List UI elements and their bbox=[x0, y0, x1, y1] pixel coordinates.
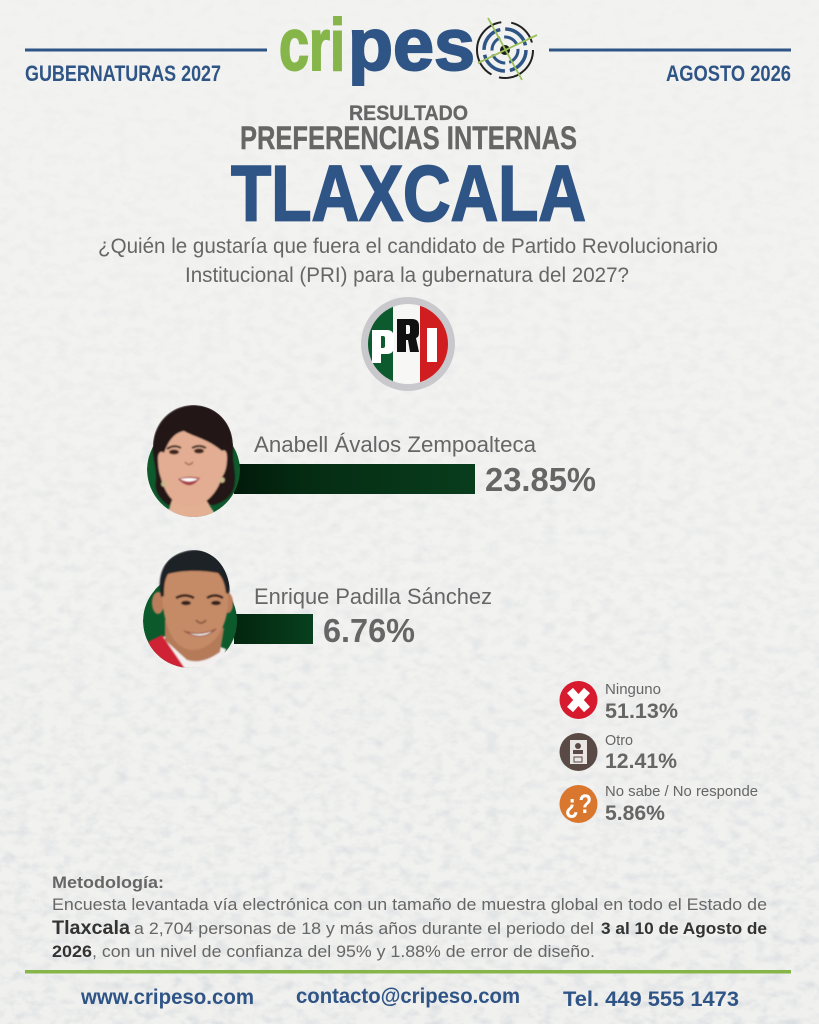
result bar bbox=[234, 614, 313, 644]
percentage: 6.76% bbox=[323, 612, 415, 649]
percentage: 23.85% bbox=[485, 461, 596, 498]
methodology text: Tlaxcala bbox=[52, 918, 130, 939]
logo: cripeso: pes bbox=[348, 5, 475, 86]
methodology text: Encuesta levantada vía electrónica con un tamaño de muestra global en todo el Estado de bbox=[52, 896, 767, 914]
icon: red cross bbox=[560, 681, 598, 719]
survey question: ¿Quién le gustaría que fuera el candidato de Partido Revolucionario bbox=[98, 235, 718, 258]
label: No sabe / No responde bbox=[605, 783, 758, 800]
header label: gubernaturas: GUBERNATURAS 2027 bbox=[25, 61, 221, 86]
logo: cripeso: cri bbox=[279, 5, 345, 86]
heading: resultado: RESULTADO bbox=[349, 102, 468, 125]
icon: question marks: ¿? bbox=[565, 789, 592, 819]
methodology text: , con un nivel de confianza del 95% y 1.88% de error de diseño. bbox=[92, 943, 595, 961]
label: Ninguno bbox=[605, 681, 661, 698]
candidate name: Enrique Padilla Sánchez bbox=[254, 584, 492, 609]
value: 12.41% bbox=[605, 749, 677, 773]
result bar bbox=[234, 464, 475, 494]
footer rule bbox=[25, 970, 791, 974]
other answer: ninguno bbox=[560, 681, 678, 723]
label: Otro bbox=[605, 732, 633, 749]
header label: date: AGOSTO 2026 bbox=[666, 61, 791, 86]
icon: target bbox=[477, 18, 537, 80]
header rule left bbox=[25, 48, 267, 52]
portrait bbox=[143, 550, 237, 671]
value: 5.86% bbox=[605, 801, 665, 825]
methodology text bbox=[52, 874, 767, 961]
heading: preferencias internas: PREFERENCIAS INTERNAS bbox=[240, 120, 577, 156]
footer: phone: Tel. 449 555 1473 bbox=[563, 987, 739, 1011]
methodology text: Metodología: bbox=[52, 874, 164, 892]
footer: website: www.cripeso.com bbox=[80, 985, 254, 1009]
heading: tlaxcala: TLAXCALA bbox=[231, 148, 586, 238]
icon: PRI party logo bbox=[361, 297, 455, 391]
value: 51.13% bbox=[605, 699, 678, 723]
methodology text: 2026 bbox=[52, 943, 92, 961]
survey question: Institucional (PRI) para la gubernatura del 2027? bbox=[185, 264, 629, 287]
methodology text: a 2,704 personas de 18 y más años durante el periodo del bbox=[134, 920, 594, 938]
candidate: Enrique Padilla Sánchez bbox=[143, 550, 492, 671]
logo: cripeso bbox=[279, 5, 537, 86]
other answer: no sabe bbox=[560, 783, 758, 825]
survey question bbox=[98, 235, 718, 287]
candidate name: Anabell Ávalos Zempoalteca bbox=[254, 432, 536, 457]
header rule right bbox=[549, 48, 791, 52]
other answer: otro bbox=[560, 732, 677, 773]
methodology text: 3 al 10 de Agosto de bbox=[601, 920, 767, 938]
icon: question marks bbox=[560, 785, 598, 823]
portrait bbox=[147, 405, 241, 519]
candidate: Anabell Ávalos Zempoalteca bbox=[147, 405, 596, 519]
icon: ballot bbox=[560, 733, 598, 771]
footer: email: contacto@cripeso.com bbox=[296, 984, 520, 1008]
